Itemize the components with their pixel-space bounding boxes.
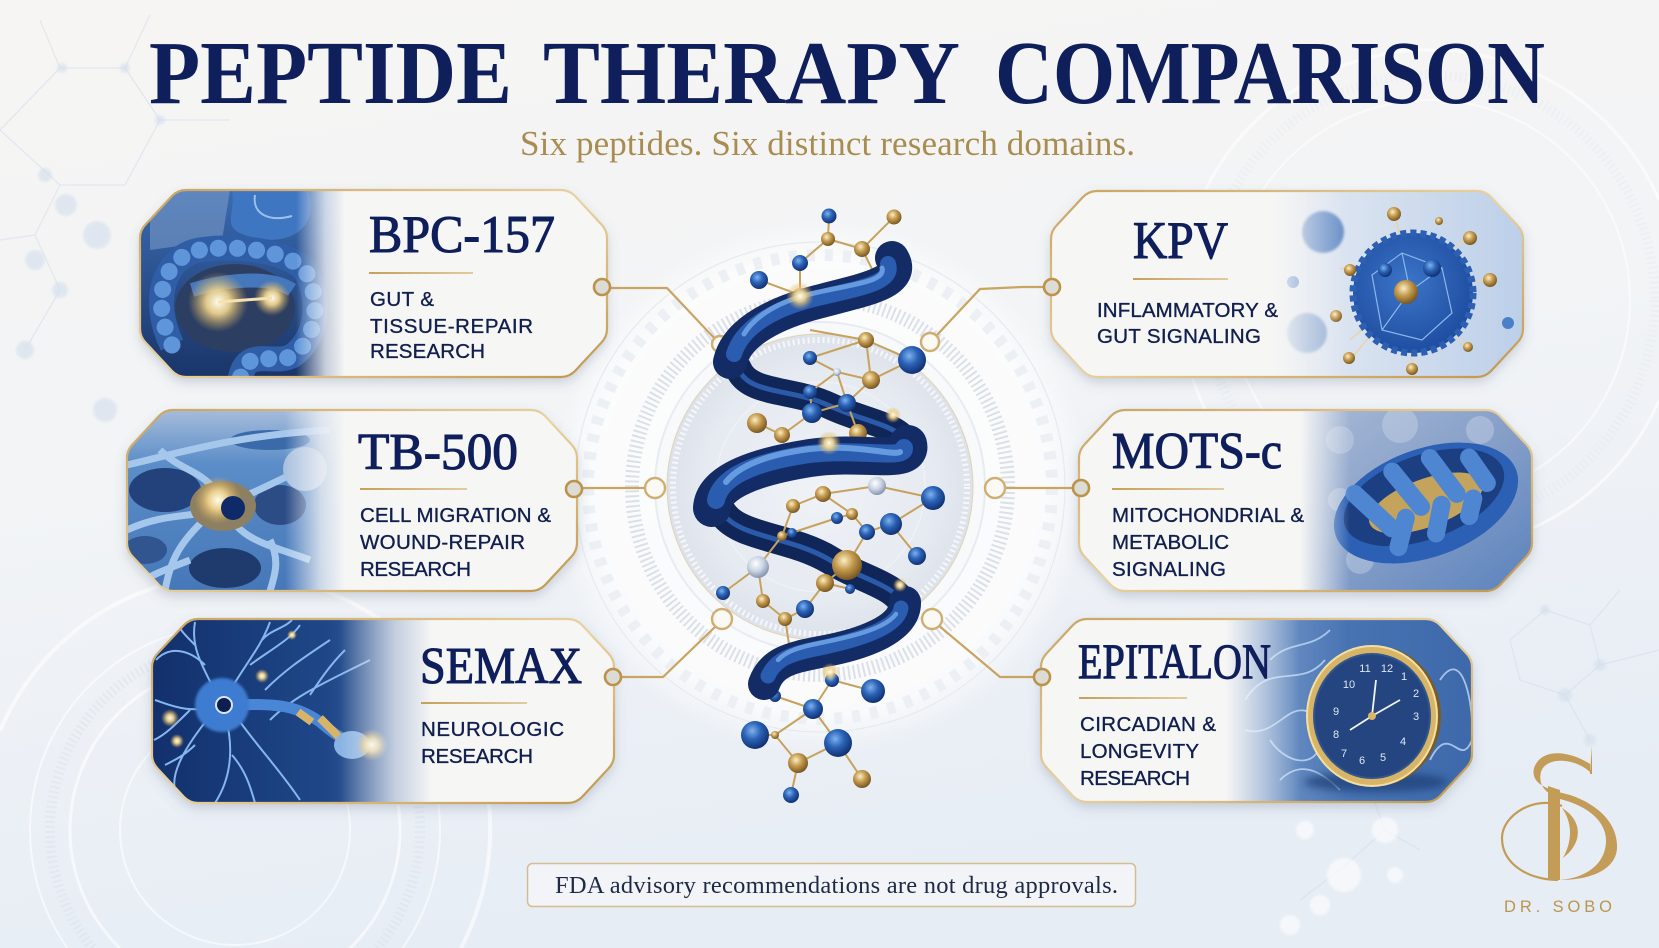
- description: GUT SIGNALING: [1097, 325, 1261, 348]
- description: [1097, 299, 1278, 348]
- description: INFLAMMATORY &: [1097, 299, 1278, 322]
- heading: TB-500: [358, 424, 518, 481]
- image: gold clock over DNA: 3: [1413, 711, 1419, 723]
- panel: TB-500: [123, 410, 582, 591]
- molecule: lower-middle cluster: [716, 477, 945, 650]
- description: TISSUE-REPAIR: [370, 315, 533, 338]
- description: [370, 288, 533, 363]
- panel: KPV: [1044, 191, 1525, 377]
- description: GUT &: [370, 288, 434, 311]
- title: [149, 24, 1545, 123]
- description: [360, 504, 551, 581]
- description: NEUROLOGIC: [421, 718, 564, 741]
- image: gold clock over DNA: 2: [1413, 688, 1419, 700]
- disclaimer box: FDA advisory recommendations are not drug approvals.: [555, 872, 1118, 899]
- description: [421, 718, 564, 768]
- title: COMPARISON: [995, 24, 1545, 123]
- image: gold clock over DNA: 5: [1380, 752, 1386, 764]
- node: [1073, 480, 1089, 496]
- disclaimer box: [528, 864, 1136, 906]
- molecule: upper-middle cluster: [747, 330, 926, 443]
- heading: KPV: [1133, 212, 1228, 270]
- description: WOUND-REPAIR: [360, 531, 525, 554]
- panel: MOTS-c: [1073, 407, 1535, 591]
- image: gold clock over DNA: 1: [1401, 671, 1407, 683]
- molecule: bottom cluster: [741, 673, 885, 803]
- sparkles on the helix: [786, 282, 907, 681]
- description: RESEARCH: [421, 745, 533, 768]
- connector lines: [574, 287, 1082, 677]
- image: gold clock over DNA: 11: [1359, 663, 1371, 675]
- panel: BPC-157: [140, 190, 610, 380]
- node: [566, 481, 582, 497]
- helix front ribbon: [712, 258, 908, 684]
- image: gold clock over DNA: [1220, 619, 1475, 803]
- panel: SEMAX: [152, 619, 621, 803]
- helix back strands: [722, 368, 906, 608]
- heading: EPITALON: [1078, 633, 1271, 689]
- node: [605, 669, 621, 685]
- image: gold clock over DNA: 12: [1381, 663, 1393, 675]
- node: [594, 279, 610, 295]
- image: neuron: [152, 619, 445, 803]
- image: gold clock over DNA: 7: [1341, 748, 1347, 760]
- description: SIGNALING: [1112, 558, 1226, 581]
- heading: MOTS-c: [1112, 423, 1282, 480]
- description: LONGEVITY: [1080, 740, 1199, 763]
- description: RESEARCH: [360, 558, 471, 581]
- node: [1044, 279, 1060, 295]
- central dial rings: [552, 219, 1088, 755]
- image: gold clock over DNA: 8: [1333, 729, 1339, 741]
- molecule: top cluster: [750, 208, 902, 302]
- panel: EPITALON: [1034, 619, 1475, 803]
- description: MITOCHONDRIAL &: [1112, 504, 1304, 527]
- subtitle: Six peptides. Six distinct research domains.: [520, 124, 1135, 163]
- logo wordmark: DR. SOBO: [1504, 898, 1612, 916]
- title: PEPTIDE: [149, 24, 512, 123]
- image: migrating cell: [128, 411, 340, 590]
- description: CELL MIGRATION &: [360, 504, 551, 527]
- title: THERAPY: [543, 24, 960, 123]
- image: digestive tract: [141, 191, 342, 376]
- image: gold clock over DNA: 9: [1333, 706, 1339, 718]
- connector rings near the helix: [645, 333, 1005, 629]
- heading: SEMAX: [420, 638, 582, 695]
- description: METABOLIC: [1112, 531, 1229, 554]
- image: gold clock over DNA: 10: [1343, 679, 1355, 691]
- description: CIRCADIAN &: [1080, 713, 1216, 736]
- heading: BPC-157: [369, 206, 555, 264]
- image: gold clock over DNA: 4: [1400, 736, 1406, 748]
- description: [1112, 504, 1304, 581]
- node: [1034, 669, 1050, 685]
- logo: Dr. Sobo emblem: [1502, 746, 1617, 916]
- image: gold clock over DNA: 6: [1359, 755, 1365, 767]
- description: RESEARCH: [1080, 767, 1190, 790]
- image: immune cell: [1286, 192, 1522, 376]
- image: mitochondrion: [1295, 407, 1535, 591]
- description: [1080, 713, 1216, 790]
- description: RESEARCH: [370, 340, 485, 363]
